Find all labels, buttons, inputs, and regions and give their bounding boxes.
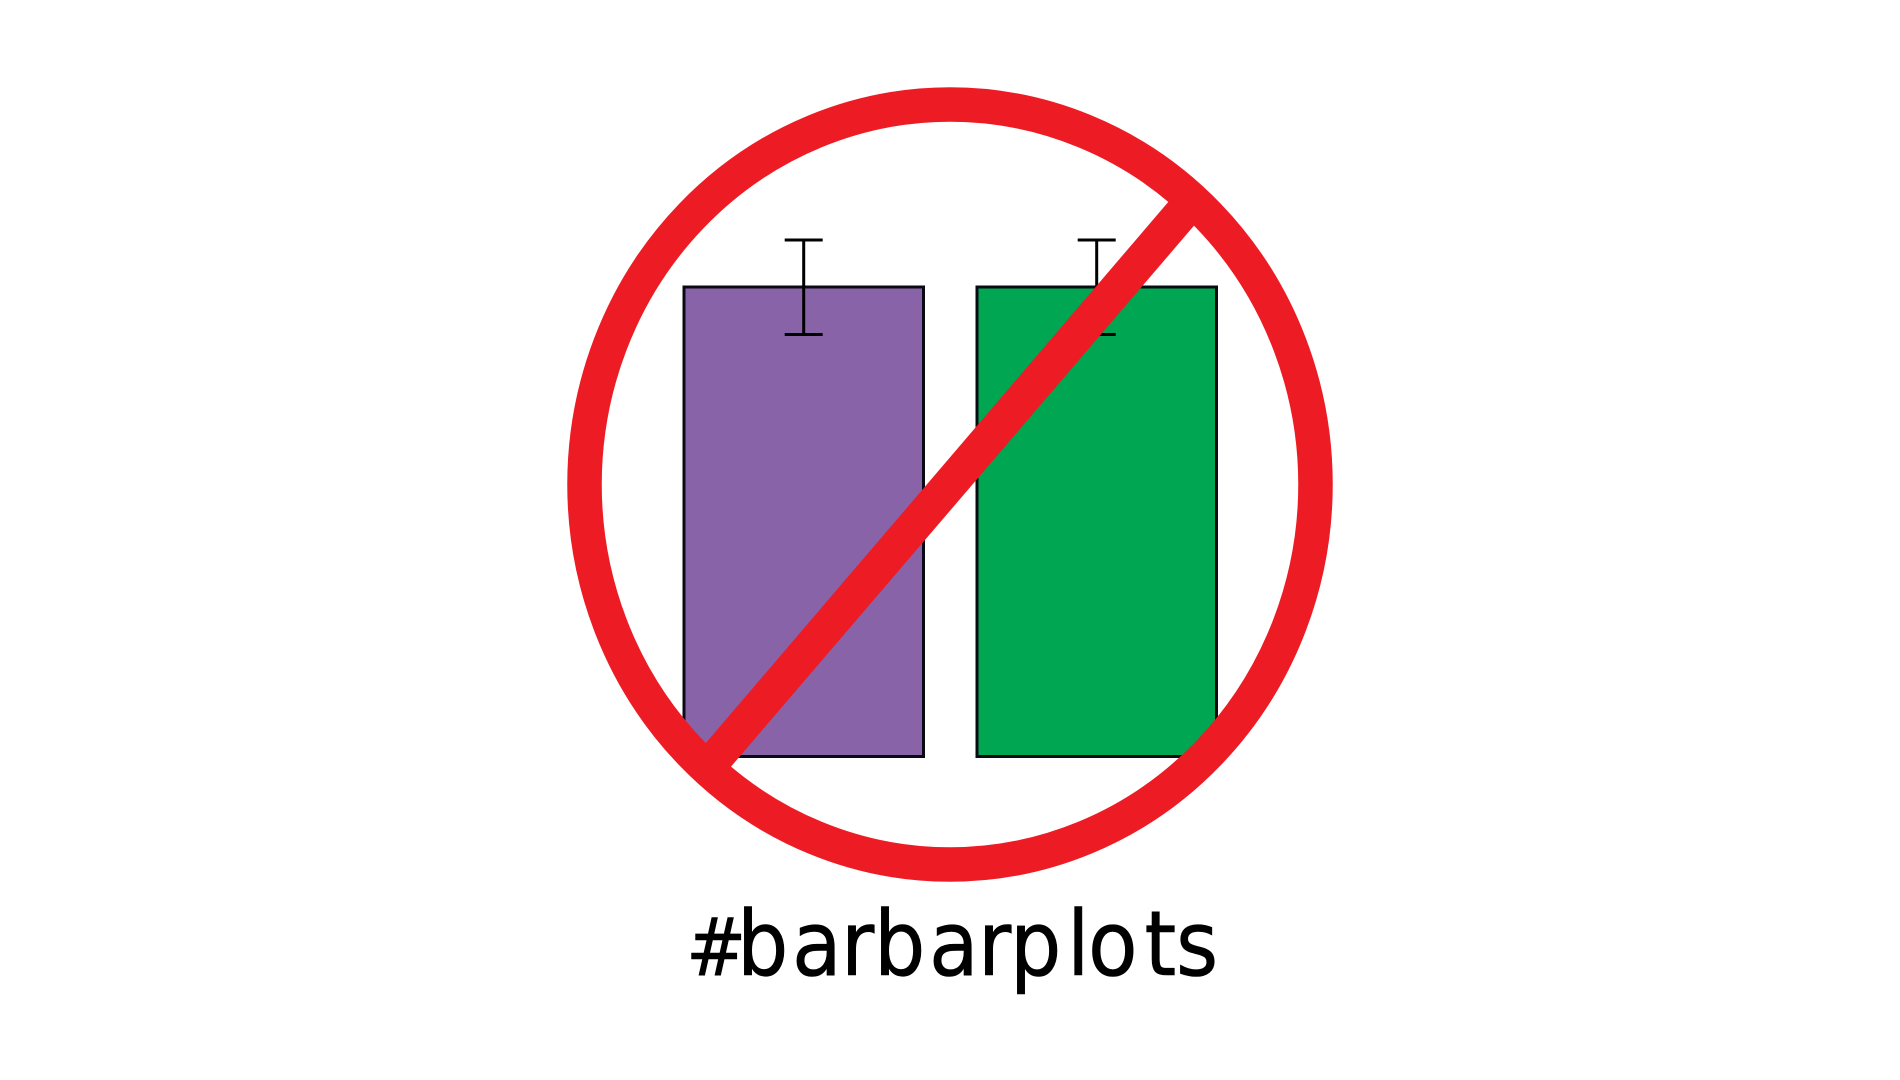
prohibition slash	[702, 197, 1198, 771]
error bar: purple	[785, 240, 823, 334]
prohibition sign	[584, 104, 1316, 864]
bar: purple	[684, 287, 924, 756]
bar: green	[977, 287, 1216, 756]
prohibition ring	[584, 104, 1316, 864]
hashtag caption: #barbarplots	[686, 892, 1218, 997]
error bar: green	[1078, 240, 1116, 334]
